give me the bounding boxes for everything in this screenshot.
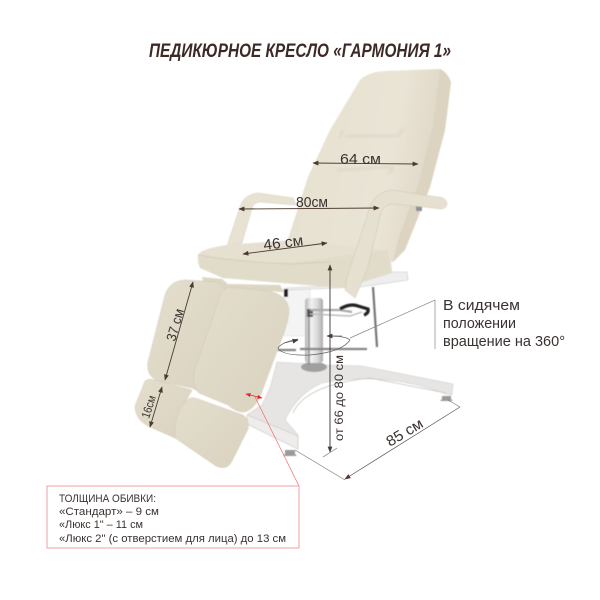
rotation note: В сидячем: [443, 297, 520, 314]
leg section: foot pads: [135, 379, 248, 468]
chair base: [247, 362, 453, 456]
hydraulic column: [278, 288, 368, 365]
rotation note: вращение на 360°: [443, 333, 565, 350]
dimension: base 85 cm: 85 см: [383, 415, 426, 450]
backrest: [287, 69, 451, 262]
upholstery thickness callout: [47, 486, 299, 548]
leg section: calf pads: [148, 277, 289, 412]
dimension: foot 16 cm: 16см: [139, 394, 159, 420]
dimension: width 80 cm: 80см: [296, 194, 328, 211]
upholstery thickness marker: [246, 394, 299, 486]
upholstery thickness callout: ТОЛЩИНА ОБИВКИ:: [59, 493, 156, 505]
right armrest: [345, 190, 447, 298]
dimension: height 66 to 80 cm: [323, 265, 346, 457]
seat cushion: [198, 240, 392, 288]
dimension: leg 37 cm: [163, 282, 193, 380]
dimension: seat depth 46 cm: 46 см: [262, 232, 304, 254]
upholstery thickness callout: «Люкс 1" – 11 см: [59, 519, 143, 531]
left armrest: [227, 193, 296, 246]
dimension: height 66 to 80 cm: от 66 до 80 см: [332, 355, 346, 441]
dimension: backrest width 64 cm: 64 см: [340, 151, 381, 168]
dimension: base 85 cm: [295, 400, 460, 480]
title: ПЕДИКЮРНОЕ КРЕСЛО «ГАРМОНИЯ 1»: [149, 41, 451, 62]
support pole: [373, 287, 377, 347]
upholstery thickness callout: «Люкс 2" (с отверстием для лица) до 13 см: [59, 533, 286, 545]
rotation ellipse and callout: [278, 297, 565, 355]
dimension: leg 37 cm: 37 см: [163, 307, 187, 343]
upholstery thickness callout: «Стандарт» – 9 см: [59, 506, 159, 518]
rotation note: положении: [443, 315, 516, 332]
armrest bracket: [416, 205, 422, 211]
rotation note: [443, 297, 565, 350]
dimension: width 80 cm: [239, 194, 379, 211]
chair illustration: [135, 69, 453, 468]
dimension: seat depth 46 cm: [243, 232, 327, 254]
seat frame: [287, 272, 408, 290]
dimension: backrest width 64 cm: [313, 151, 418, 168]
